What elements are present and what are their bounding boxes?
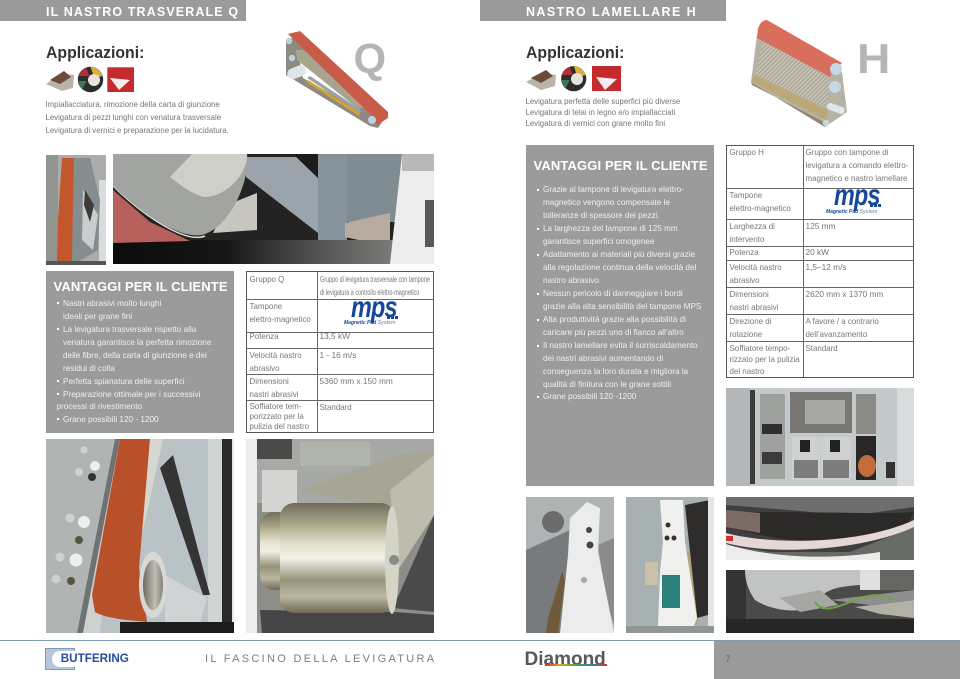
panel: vantaggi per il cliente H: qualità di finitura con le grane sottili <box>543 380 671 389</box>
panel: vantaggi per il cliente Q: Perfetta spianatura delle superfici <box>63 376 185 386</box>
panel: vantaggi per il cliente H: caricare più pezzi uno di fianco all’altro <box>543 328 684 337</box>
footer page number block <box>714 641 960 679</box>
panel: vantaggi per il cliente Q: venatura garantisce la perfetta rimozione <box>63 338 211 346</box>
photo: roller with green wire <box>726 570 914 633</box>
icons: application types Q <box>46 66 134 92</box>
photo: orange belt and roller <box>46 439 234 633</box>
panel: vantaggi per il cliente Q: Nastri abrasivi molto lunghi <box>63 298 161 308</box>
text: applicazioni Q: Levigatura di vernici e preparazione per la lucidatura. <box>46 126 229 135</box>
heading: applicazioni H: Applicazioni: <box>526 43 624 62</box>
panel: vantaggi per il cliente H: grazie alla alta sensibilità del tampone MPS <box>543 302 701 311</box>
letter Q: Q <box>354 35 386 82</box>
panel: vantaggi per il cliente H <box>526 145 714 486</box>
table: specifiche gruppo Q: di levigatura a controllo elettro-magnetico <box>320 286 419 296</box>
text: applicazioni Q: Levigatura di pezzi lunghi con venatura trasversale <box>46 113 221 122</box>
table: specifiche gruppo Q: nastri abrasivi <box>250 390 298 399</box>
table: specifiche gruppo H: del nastro <box>730 367 764 376</box>
photo: belt underside wide view Q <box>113 154 434 264</box>
icons: application types H <box>526 66 621 92</box>
panel: vantaggi per il cliente Q: residui di colla <box>63 364 115 372</box>
table: specifiche gruppo Q: Standard <box>320 402 352 412</box>
table: specifiche gruppo Q: elettro-magnetico <box>250 315 311 324</box>
panel: vantaggi per il cliente Q: La levigatura trasversale rispetto alla <box>63 324 196 334</box>
text: applicazioni H: Levigatura di telai in legno e/o impiallacciati <box>526 108 675 117</box>
table: specifiche gruppo Q: Dimensioni <box>250 377 289 386</box>
photo: white column with chain <box>526 497 614 633</box>
logo: MPS magnetic pad system H: Magnetic Pad System <box>826 209 877 215</box>
photo: white column with green panel <box>626 497 714 633</box>
panel: vantaggi per il cliente H: Grazie al tampone di levigatura elettro- <box>543 185 684 194</box>
panel: vantaggi per il cliente Q <box>46 271 234 433</box>
panel: vantaggi per il cliente H: magnetico vengono compensate le <box>543 198 670 207</box>
photo: lamellar belt close-up <box>726 497 914 560</box>
table: specifiche gruppo Q: Velocità nastro <box>250 351 302 360</box>
table: specifiche gruppo Q: porizzato per la <box>250 412 304 421</box>
text: applicazioni H: Levigatura perfetta delle superfici più diverse <box>526 96 680 106</box>
text: applicazioni H <box>526 96 680 128</box>
letter H: H <box>857 35 890 82</box>
table: specifiche gruppo Q: Soffiatore tem- <box>250 402 301 410</box>
panel: vantaggi per il cliente H: Grane possibili 120 -1200 <box>543 392 636 401</box>
table: specifiche gruppo H: Potenza <box>730 248 759 257</box>
panel: vantaggi per il cliente Q: ideali per grane fini <box>63 312 132 320</box>
panel: vantaggi per il cliente Q: Grane possibili 120 - 1200 <box>63 414 159 424</box>
footer rule <box>0 640 960 641</box>
heading: applicazioni Q: Applicazioni: <box>46 43 144 62</box>
footer slogan: IL FASCINO DELLA LEVIGATURA <box>205 653 436 665</box>
table: specifiche gruppo Q: Potenza <box>250 332 279 341</box>
panel: vantaggi per il cliente H: conseguenza la loro durata e migliora la <box>543 367 688 376</box>
table: specifiche gruppo H: rotazione <box>730 330 762 338</box>
logo: MPS magnetic pad system: Magnetic Pad System <box>344 320 395 326</box>
panel: vantaggi per il cliente H: alla regolazione continua della velocità del <box>543 263 696 272</box>
table: specifiche gruppo Q: Gruppo Q <box>250 275 284 284</box>
panel: vantaggi per il cliente H: dei nastri abrasivi aumentando di <box>543 354 663 363</box>
panel: vantaggi per il cliente H: garantisce superfici omogenee <box>543 237 655 246</box>
illustration: Q sanding belt unit <box>286 31 388 128</box>
header bar: il nastro trasversale Q: IL NASTRO TRASVERALE Q <box>46 5 239 19</box>
table: specifiche gruppo H: 2620 mm x 1370 mm <box>806 288 883 298</box>
footer page number block: 7 <box>726 654 731 664</box>
table: specifiche gruppo H: Tampone <box>730 190 762 200</box>
panel: vantaggi per il cliente Q: Preparazione ottimale per i successivi <box>63 390 200 398</box>
panel: vantaggi per il cliente H: La larghezza del tampone di 125 mm <box>543 224 678 233</box>
table: specifiche gruppo H: rizzato per la pulizia <box>730 355 800 364</box>
panel: vantaggi per il cliente Q: delle fibre, della carta di giunzione e dei <box>63 350 207 360</box>
table: specifiche gruppo H: intervento <box>730 234 764 244</box>
table: specifiche gruppo H: abrasivo <box>730 276 760 284</box>
logo: MPS magnetic pad system: mps <box>351 291 397 324</box>
table: specifiche gruppo H: levigatura a comando elettro- <box>806 161 908 170</box>
panel heading H: VANTAGGI PER IL CLIENTE <box>534 158 708 172</box>
table: specifiche gruppo Q: pulizia del nastro <box>250 422 309 431</box>
table: specifiche gruppo H: A favore / a contrario <box>806 316 879 326</box>
illustration: H sanding belt unit <box>751 20 847 127</box>
panel: vantaggi per il cliente H: nastro abrasivo <box>543 276 599 285</box>
photo: polished steel drum <box>246 439 434 633</box>
table: specifiche gruppo H: dell’avanzamento <box>806 330 867 338</box>
table: specifiche gruppo H: Larghezza di <box>730 222 775 230</box>
logo: Butfering: BUTFERING <box>61 652 129 664</box>
panel: vantaggi per il cliente H: Il nastro lamellare evita il surriscaldamento <box>543 341 698 350</box>
table: specifiche gruppo H: Dimensioni <box>730 290 769 298</box>
logo: MPS magnetic pad system H: mps <box>834 179 880 212</box>
table: specifiche gruppo H: Soffiatore tempo- <box>730 344 790 353</box>
table: specifiche gruppo H: 1,5–12 m/s <box>806 262 847 272</box>
table: specifiche gruppo H: magnetico e nastro lamellare <box>806 174 907 183</box>
table: specifiche gruppo H: 20 kW <box>806 247 829 257</box>
logo: Butfering <box>45 648 129 670</box>
text: applicazioni H: Levigatura di vernici con grane molto fini <box>526 119 665 128</box>
panel: vantaggi per il cliente H: Alta produttività grazie alla possibilità di <box>543 315 686 324</box>
logo: Diamond: Diamond <box>524 648 606 670</box>
table: specifiche gruppo Q: 13,5 kW <box>320 331 350 341</box>
table: specifiche gruppo Q: Gruppo di levigatura trasversale con tampone <box>320 274 429 284</box>
panel: vantaggi per il cliente H: Nessun pericolo di danneggiare i bordi <box>543 289 683 298</box>
panel: vantaggi per il cliente H: tolleranze di spessore dei pezzi. <box>543 211 660 220</box>
text: applicazioni Q: Impiallacciatura, rimozione della carta di giunzione <box>46 100 220 109</box>
panel heading Q: VANTAGGI PER IL CLIENTE <box>54 278 228 294</box>
table: specifiche gruppo Q: 5360 mm x 150 mm <box>320 376 393 386</box>
table: specifiche gruppo H <box>726 145 914 378</box>
table: specifiche gruppo Q: abrasivo <box>250 364 280 373</box>
table: specifiche gruppo H: Gruppo H <box>730 148 764 157</box>
text: applicazioni Q <box>46 100 229 135</box>
table: specifiche gruppo Q: Tampone <box>250 302 282 311</box>
table: specifiche gruppo Q: 1 - 16 m/s <box>320 350 356 360</box>
table: specifiche gruppo H: Direzione di <box>730 316 771 326</box>
header bar: nastro lamellare H: NASTRO LAMELLARE H <box>526 5 697 19</box>
header bar: nastro lamellare H <box>480 0 726 20</box>
header bar: il nastro trasversale Q <box>0 0 246 20</box>
table: specifiche gruppo H: Standard <box>806 344 838 353</box>
photo: machine interior front view <box>726 388 914 486</box>
panel: vantaggi per il cliente H: Adattamento ai materiali più diversi grazie <box>543 250 695 259</box>
table: specifiche gruppo H: nastri abrasivi <box>730 302 778 312</box>
table: specifiche gruppo H: elettro-magnetico <box>730 204 791 212</box>
table: specifiche gruppo H: Velocità nastro <box>730 262 782 272</box>
table: specifiche gruppo H: 125 mm <box>806 220 835 230</box>
panel: vantaggi per il cliente Q: processi di rivestimento <box>56 402 142 411</box>
table: specifiche gruppo Q <box>246 271 434 433</box>
photo: belt, small view Q <box>46 155 106 265</box>
table: specifiche gruppo H: Gruppo con tampone di <box>806 148 888 157</box>
